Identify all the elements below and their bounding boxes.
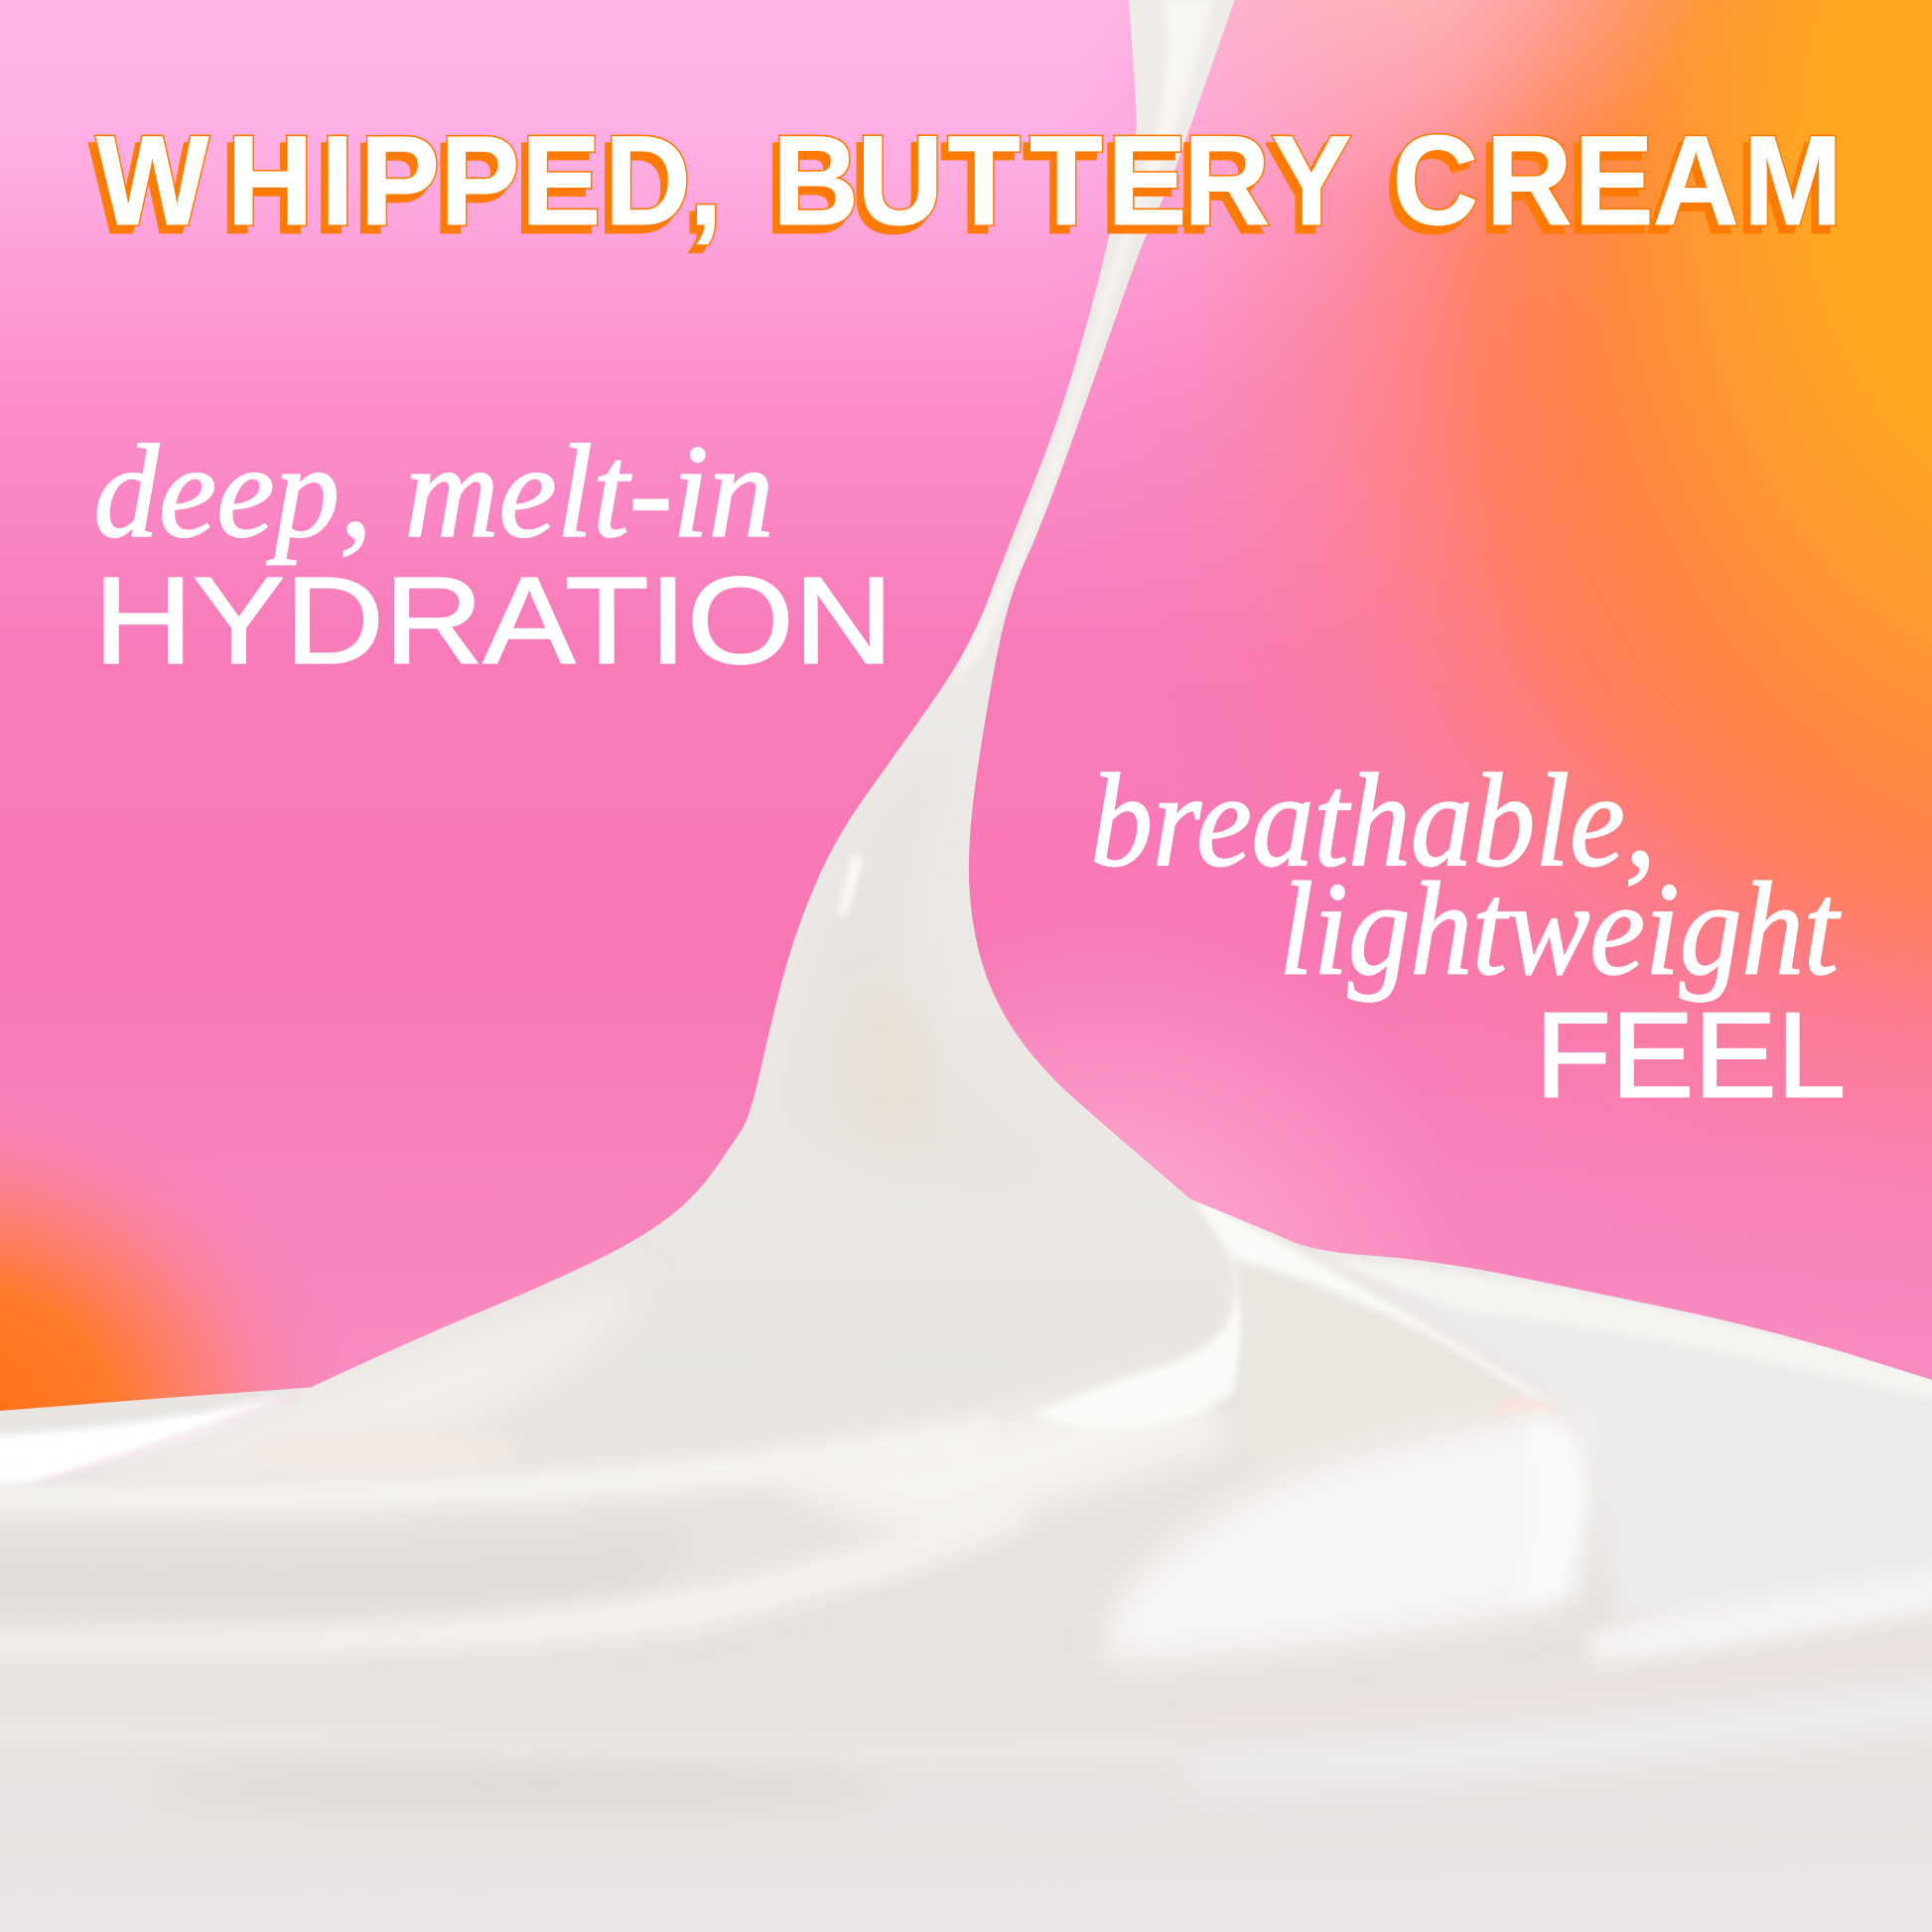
title shadow layer: BUTTERY (766, 118, 1345, 259)
trunk shading (828, 961, 862, 1096)
title face layer: BUTTERY (772, 110, 1351, 252)
second lobe (1236, 1264, 1538, 1478)
title outline layer: CREAM (1392, 110, 1843, 252)
lighter pink band lower left (0, 1716, 1182, 1765)
bottom pale blush (0, 1861, 1932, 1932)
broad light band lower right (1182, 1670, 1932, 1787)
callout: breathable, lightweight feel (1090, 747, 1846, 1123)
caps line: FEEL (1535, 988, 1846, 1123)
italic line two: lightweight (1279, 855, 1841, 1002)
title face layer: CREAM (1392, 110, 1843, 252)
pink tip (1484, 1395, 1573, 1417)
italic line: deep, melt-in (93, 418, 773, 565)
dark soft shadow under band (0, 1528, 690, 1614)
darker soft shadow (148, 1764, 888, 1809)
back rim highlight (1324, 1257, 1932, 1405)
bright band across mound base (0, 1446, 856, 1512)
white lobe base patch (1105, 1411, 1586, 1663)
lower soft fold band (806, 1412, 1215, 1525)
caps line: HYDRATION (93, 553, 894, 690)
title shadow layer (90, 118, 1837, 259)
title: whipped, buttery cream (90, 110, 1843, 259)
title outline layer: BUTTERY (772, 110, 1351, 252)
warm patch on trunk (894, 1016, 917, 1050)
trunk glint (838, 853, 863, 918)
light curved band lower left (0, 1521, 1007, 1656)
italic line one: breathable, (1090, 747, 1656, 894)
warm blush on shoulder (348, 1442, 504, 1470)
back surface behind lobe (1315, 1252, 1932, 1617)
bright sliver lower left (0, 1400, 276, 1484)
pink streak (1182, 1639, 1932, 1725)
callout: deep, melt-in hydration (93, 418, 894, 690)
title outline layer (96, 110, 1843, 252)
lobe upper rim (1199, 1203, 1538, 1396)
brightest white on lobe (1516, 1423, 1585, 1601)
title face layer: WHIPPED, (96, 110, 723, 252)
bright right band (1589, 1555, 1932, 1663)
mound left shoulder light (194, 1326, 569, 1461)
title outline layer: WHIPPED, (96, 110, 723, 252)
title shadow layer: WHIPPED, (90, 118, 716, 259)
upper stream highlight (964, 2, 1209, 667)
title face layer (96, 110, 1843, 252)
fold rim of the mound (1042, 1292, 1241, 1424)
title shadow layer: CREAM (1386, 118, 1837, 259)
